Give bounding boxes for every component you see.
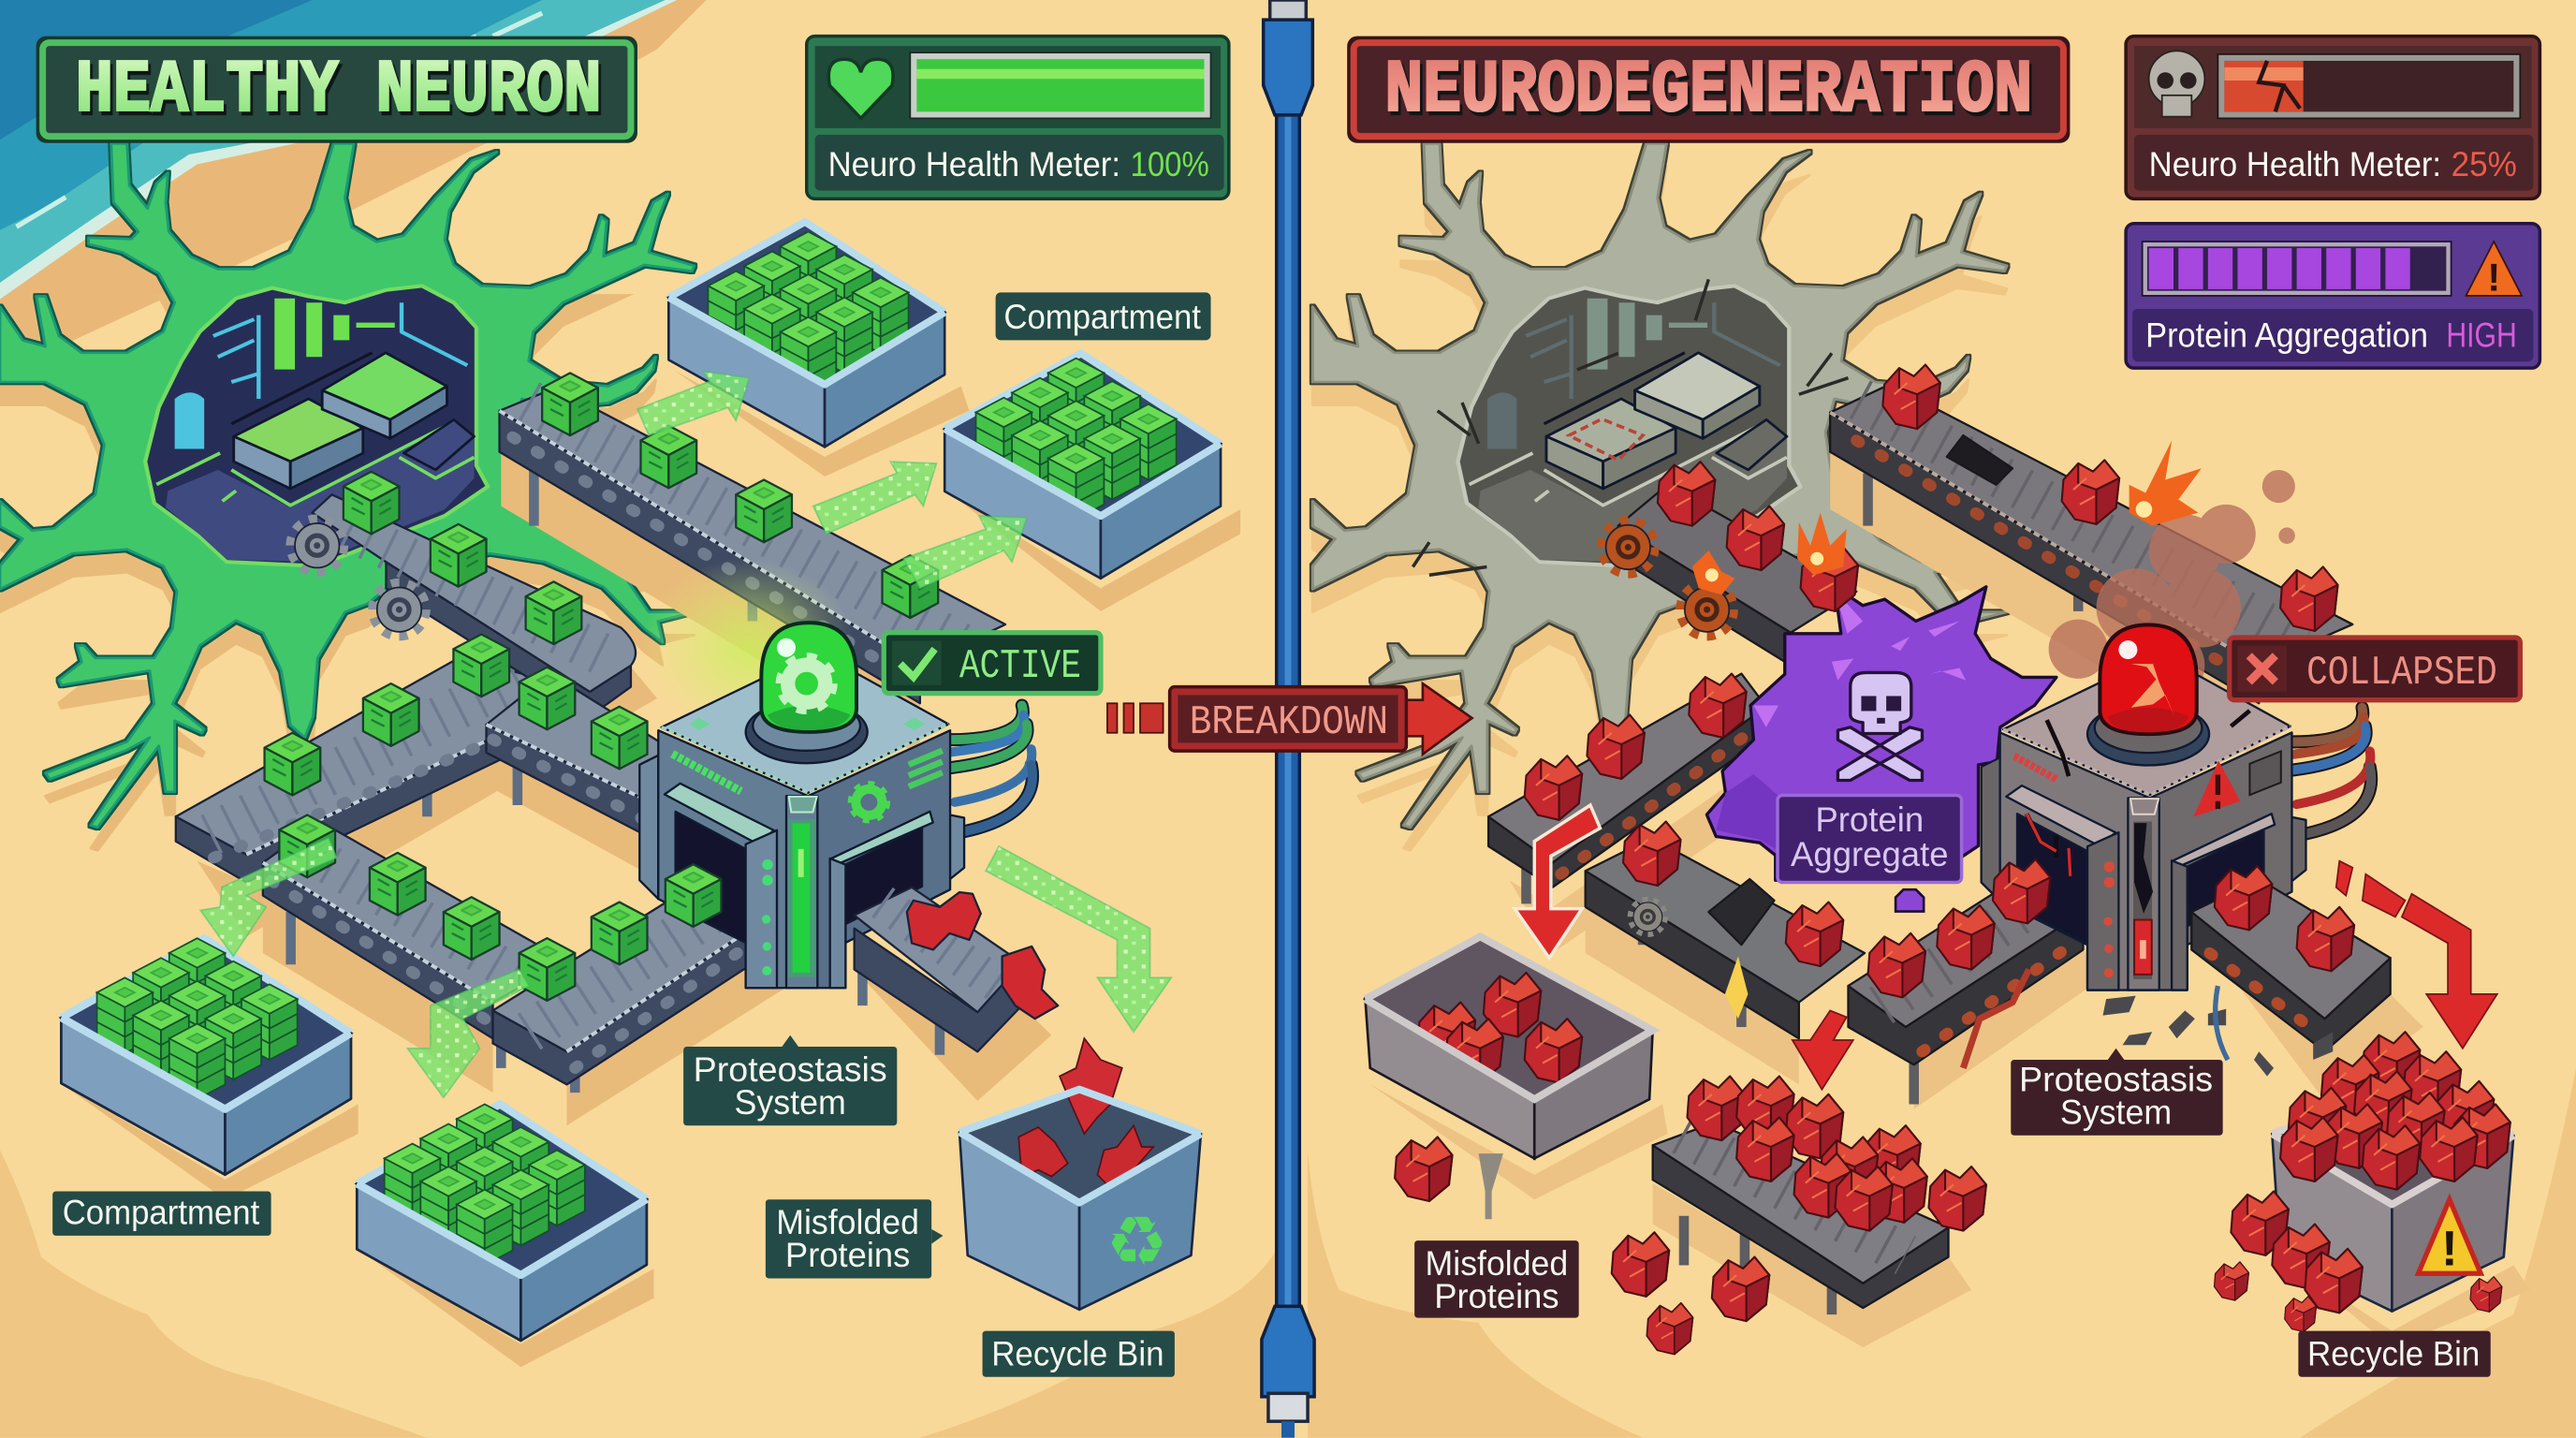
lower left belt xyxy=(263,822,567,1038)
warning sign: ! xyxy=(2441,1221,2458,1276)
central USB cable divider xyxy=(1262,0,1314,1438)
meter label: Neuro Health Meter: xyxy=(2149,145,2441,183)
label: misfolded proteins: Misfolded xyxy=(1426,1244,1568,1283)
icon: warning triangle xyxy=(2466,242,2522,300)
left return belt xyxy=(176,657,590,883)
title: healthy neuron: HEALTHY NEURON xyxy=(76,49,601,133)
compartment top xyxy=(668,222,970,477)
meter label: 100% xyxy=(1131,145,1209,183)
green status stripe xyxy=(788,819,815,977)
label: misfolded proteins xyxy=(1414,1240,1579,1318)
label: protein aggregate: Aggregate xyxy=(1791,835,1949,873)
neuro health meter 100% xyxy=(807,37,1229,198)
compartment lower left xyxy=(61,938,359,1199)
torn cables and proteostasis machine (collapsed) xyxy=(1982,624,2371,990)
neuron: green dendrites and soma xyxy=(0,143,695,828)
exit conveyor with misfolded proteins xyxy=(855,888,1058,1055)
broken conveyor belts xyxy=(1488,385,2423,1109)
ruined cell interior xyxy=(1457,286,1800,566)
skull and crossbones icon xyxy=(1837,672,1922,781)
cell output belt xyxy=(312,494,636,716)
purple protein aggregate blob xyxy=(1706,587,2056,912)
label: protein aggregate: Protein xyxy=(1815,800,1924,839)
proteostasis machine (healthy) xyxy=(639,623,1032,988)
label: compartment upper: Compartment xyxy=(1003,298,1201,336)
label: recycle bin: Recycle Bin xyxy=(991,1335,1164,1373)
badge: collapsed: COLLAPSED xyxy=(2306,650,2497,697)
warning decal xyxy=(2193,760,2240,816)
meter label: 25% xyxy=(2452,145,2517,183)
label: proteostasis system: System xyxy=(2060,1093,2172,1132)
label: protein aggregate xyxy=(1778,795,1962,883)
gears xyxy=(291,520,426,636)
cracks and torn wiring xyxy=(2027,711,2249,876)
sea and shoreline xyxy=(0,0,707,374)
label: misfolded proteins: Misfolded xyxy=(776,1203,919,1241)
neuron cracks xyxy=(1412,279,1848,600)
label: misfolded proteins xyxy=(766,1199,943,1278)
conveyor belts xyxy=(176,388,1051,1125)
overflowing recycle bin with warning xyxy=(2215,1032,2530,1347)
recycle icon: ♻ xyxy=(1105,1202,1168,1282)
exit conveyor broken xyxy=(2191,879,2391,1051)
lower right belt xyxy=(1848,871,2083,1064)
upper broken belt xyxy=(1830,385,2352,703)
title: healthy neuron xyxy=(37,37,637,143)
smoke cloud xyxy=(2049,470,2295,701)
dangling cable xyxy=(1963,970,2029,1068)
icon: green heart xyxy=(828,59,893,118)
breakdown arrow banner xyxy=(1107,683,1472,755)
protein aggregation meter HIGH xyxy=(2126,224,2539,368)
label: proteostasis system: System xyxy=(735,1083,846,1122)
red failure arrows xyxy=(1515,805,2497,1090)
cables xyxy=(950,705,1032,833)
green glow around beacon xyxy=(640,559,855,740)
left return belt xyxy=(1488,674,1766,888)
scattered red proteins xyxy=(1395,1137,1769,1355)
broken lower belt xyxy=(1586,838,1865,1038)
health bar depleted xyxy=(2217,54,2520,118)
icon: warning triangle: ! xyxy=(2487,256,2500,300)
meter label xyxy=(815,135,1224,191)
sparks and explosions xyxy=(1692,440,2202,1019)
recycle bin with misfolded proteins xyxy=(959,1038,1201,1310)
green cubes behind machine xyxy=(265,373,938,1001)
label: proteostasis system: Proteostasis xyxy=(694,1050,887,1089)
label: recycle bin: Recycle Bin xyxy=(2307,1335,2480,1373)
RIGHT PANEL: neurodegeneration xyxy=(1312,37,2539,1377)
cell belt xyxy=(1618,485,1856,666)
chip red marks on box xyxy=(1569,419,1643,460)
label: proteostasis system xyxy=(2011,1049,2223,1136)
droplet xyxy=(1895,889,1924,912)
aggregation label xyxy=(2132,309,2533,361)
degraded grey neuron xyxy=(1312,143,2007,828)
inner belt xyxy=(487,674,681,842)
grey bin with red proteins xyxy=(1365,936,1667,1199)
title: neurodegeneration: NEURODEGENERATION xyxy=(1385,49,2032,133)
bottom plug xyxy=(1262,1306,1314,1438)
green beacon with gear xyxy=(761,623,856,732)
pile on conveyor xyxy=(1687,1077,1986,1231)
title: neurodegeneration xyxy=(1347,37,2070,143)
lower right belt xyxy=(493,888,764,1084)
neuron cutaway interior with machinery xyxy=(145,286,488,566)
neuron ground shadow xyxy=(0,294,695,852)
warning sign xyxy=(2419,1199,2481,1276)
meter label: Neuro Health Meter: xyxy=(828,145,1120,183)
small conveyor piled with proteins xyxy=(1653,1123,1971,1347)
compartment bins with stacked proteins xyxy=(61,222,1240,1367)
upper long belt xyxy=(500,388,1005,703)
LEFT PANEL: healthy neuron xyxy=(0,37,1240,1377)
segmented bar xyxy=(2143,242,2452,296)
label: misfolded proteins: Proteins xyxy=(785,1236,910,1274)
belt shadows xyxy=(198,452,1051,1125)
meter label xyxy=(2134,135,2533,191)
badge: collapsed xyxy=(2230,638,2520,700)
compartment lower centre xyxy=(357,1104,654,1367)
red misfolded protein chunks on belts xyxy=(1525,365,2354,997)
degraded neuron ground shadow xyxy=(1312,167,2007,850)
label: proteostasis system: Proteostasis xyxy=(2019,1060,2213,1098)
gear decal xyxy=(851,785,887,820)
badge: active: ACTIVE xyxy=(959,643,1081,690)
badge: active xyxy=(884,633,1101,694)
cube at machine door xyxy=(666,864,721,927)
green flow arrows xyxy=(200,372,1171,1097)
rusted gears xyxy=(1602,521,1734,636)
label: proteostasis system xyxy=(683,1035,897,1125)
grey broken gear xyxy=(1631,900,1665,934)
broken status light xyxy=(2133,821,2153,979)
aggregation label: Protein Aggregation xyxy=(2145,315,2428,354)
label: compartment lower: Compartment xyxy=(63,1194,259,1232)
red collapsed beacon xyxy=(2100,624,2197,734)
icon: skull xyxy=(2149,51,2204,117)
debris xyxy=(2103,986,2333,1077)
neuro health meter 25% xyxy=(2126,37,2539,198)
aggregation label: HIGH xyxy=(2446,315,2517,354)
label: misfolded proteins: Proteins xyxy=(1434,1277,1559,1315)
breakdown arrow banner: BREAKDOWN xyxy=(1190,699,1388,746)
health bar full xyxy=(910,52,1211,118)
top plug xyxy=(1264,0,1312,115)
compartment right xyxy=(944,353,1240,611)
